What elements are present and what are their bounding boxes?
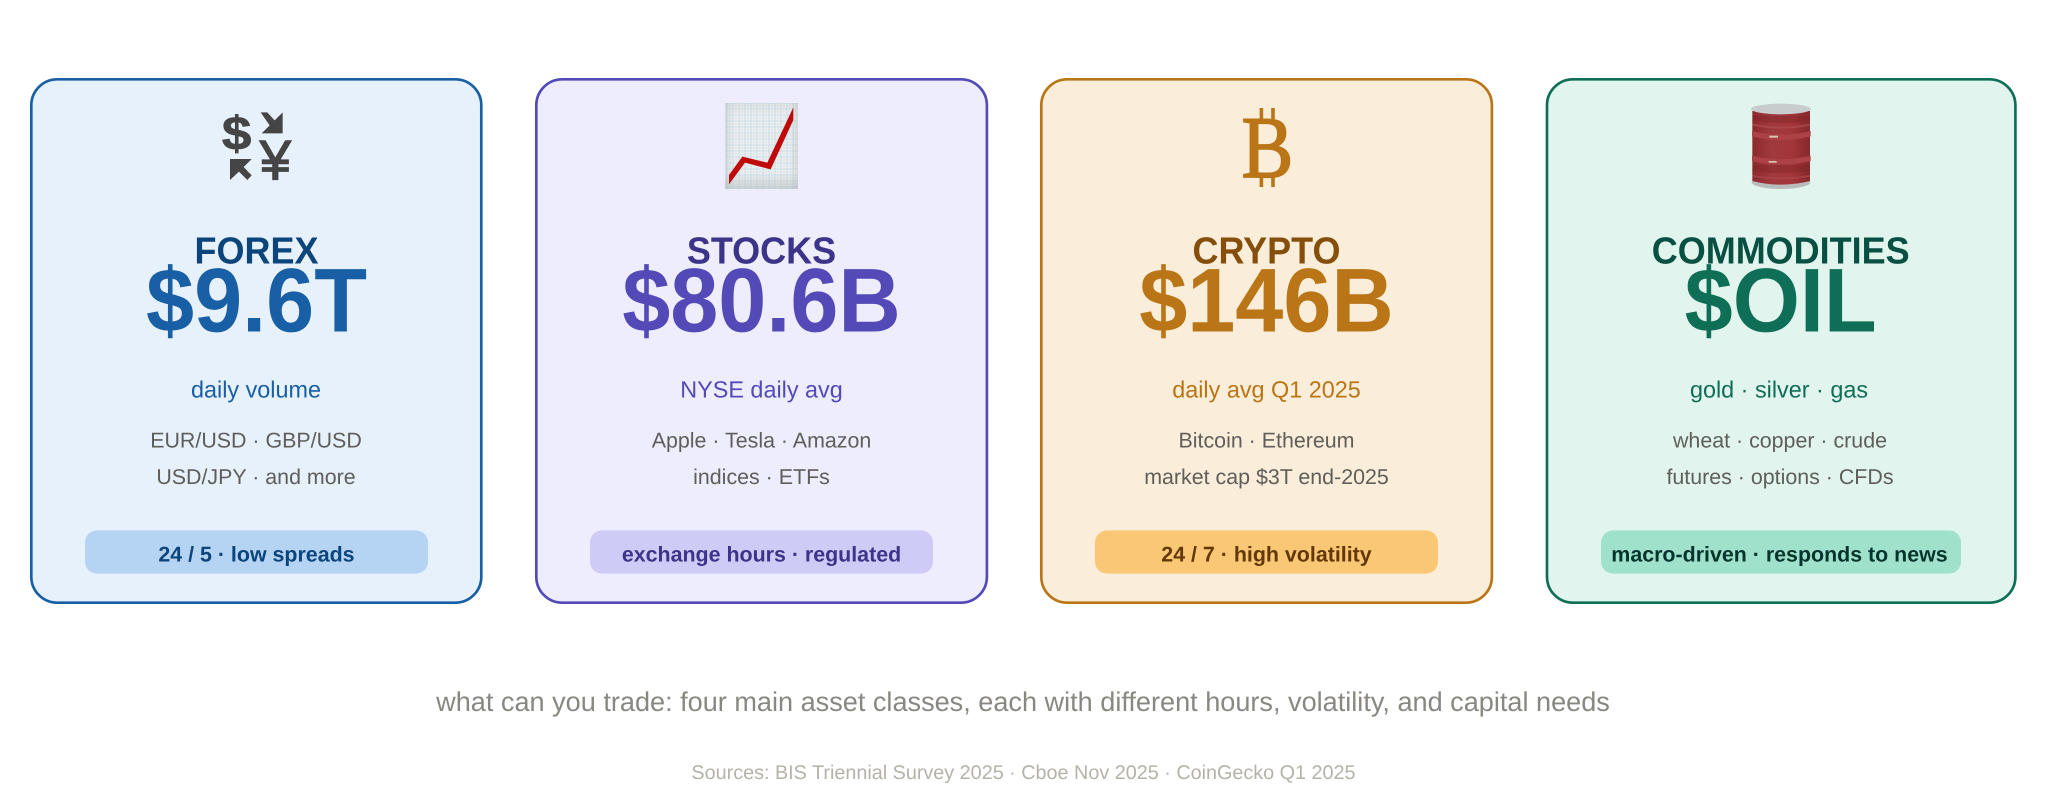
caption: what can you trade: four main asset classes, each with different hours, volatility, and capital needs: [435, 686, 1610, 717]
heading: forex: FOREX: [194, 229, 319, 272]
text: stocks examples: Apple · Tesla · Amazon: [652, 428, 871, 452]
badge: forex hours: [85, 530, 428, 574]
label: stocks stat: NYSE daily avg: [680, 376, 843, 402]
stat: commodities: $OIL: [1685, 251, 1877, 352]
text: forex pairs: [150, 428, 362, 489]
text: stocks examples: indices · ETFs: [693, 465, 830, 489]
text: stocks examples: [652, 428, 871, 489]
icon: chart increasing: [725, 103, 798, 189]
panel: crypto: [1041, 79, 1492, 603]
label: forex stat: daily volume: [191, 376, 321, 402]
text: forex pairs: USD/JPY · and more: [156, 465, 356, 489]
label: crypto stat: daily avg Q1 2025: [1172, 376, 1361, 402]
badge: crypto hours: [1095, 530, 1438, 574]
heading: commodities: COMMODITIES: [1652, 229, 1910, 272]
heading: crypto: CRYPTO: [1192, 229, 1341, 272]
icon: bitcoin: B: [1242, 100, 1293, 197]
text: crypto examples: [1144, 428, 1389, 489]
badge: stocks hours: [590, 530, 933, 574]
text: crypto examples: Bitcoin · Ethereum: [1179, 428, 1354, 452]
text: commodities examples: futures · options · CFDs: [1666, 465, 1894, 489]
badge: stocks hours: exchange hours · regulated: [622, 542, 901, 566]
stat: forex volume: $9.6T: [146, 251, 367, 352]
badge: crypto hours: 24 / 7 · high volatility: [1161, 542, 1372, 566]
icon: currency exchange: [222, 107, 291, 192]
panel: commodities: [1547, 79, 2015, 603]
badge: forex hours: 24 / 5 · low spreads: [158, 542, 355, 566]
text: commodities examples: wheat · copper · crude: [1672, 428, 1887, 452]
label: commodities types: gold · silver · gas: [1690, 376, 1868, 402]
panel: stocks: [536, 79, 987, 603]
text: forex pairs: EUR/USD · GBP/USD: [150, 428, 362, 452]
text: crypto examples: market cap $3T end-2025: [1144, 465, 1389, 489]
stat: crypto volume: $146B: [1139, 251, 1394, 352]
badge: commodities drivers: [1601, 530, 1961, 574]
stat: stocks volume: $80.6B: [622, 251, 901, 352]
icon: currency exchange: ¥: [259, 129, 291, 192]
panel: forex: [31, 79, 481, 603]
badge: commodities drivers: macro-driven · responds to news: [1611, 542, 1948, 566]
heading: stocks: STOCKS: [687, 229, 836, 272]
icon: currency exchange: $: [222, 107, 251, 160]
source note: Sources: BIS Triennial Survey 2025 · Cboe Nov 2025 · CoinGecko Q1 2025: [691, 762, 1356, 784]
icon: oil barrel: [1751, 104, 1811, 189]
text: commodities examples: [1666, 428, 1894, 489]
